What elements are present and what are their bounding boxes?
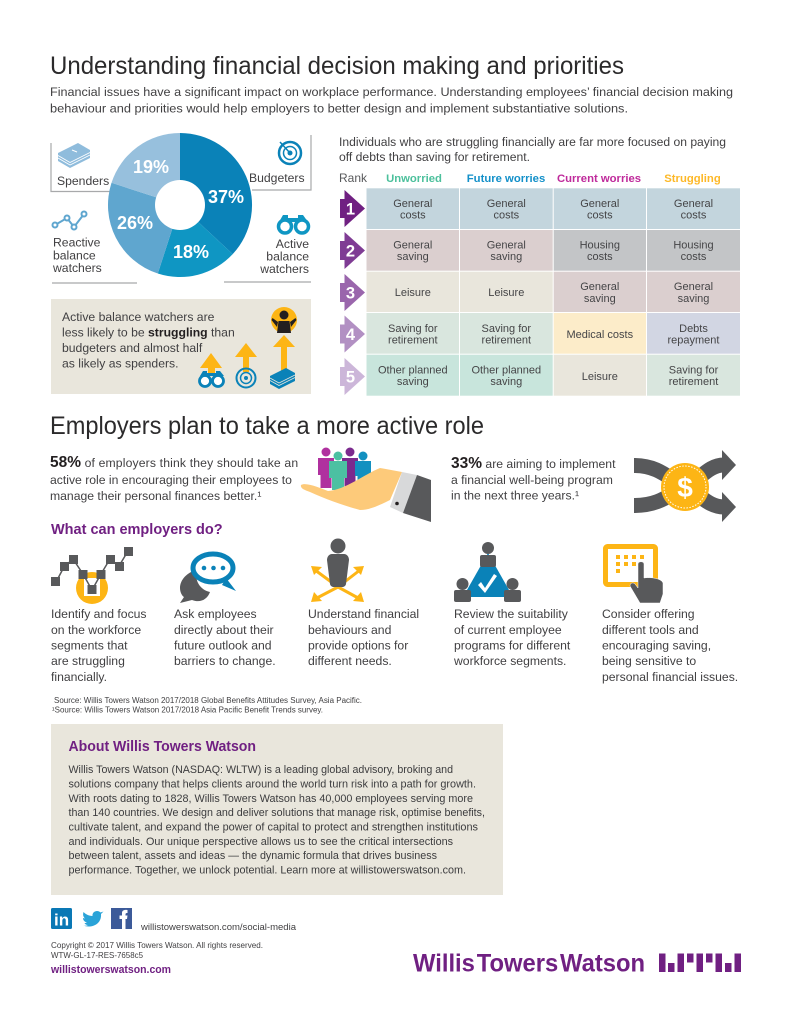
table: priorities by rank — [339, 171, 740, 396]
row 1 cells — [366, 188, 740, 229]
about text: between talent, assets and ideas — the dynamic formula that drives business — [68, 850, 437, 862]
copyright: Copyright © 2017 Willis Towers Watson. All rights reserved. — [51, 941, 263, 950]
rank badges: 2 — [346, 242, 355, 260]
text: encouraging saving, — [602, 638, 711, 652]
row 2 cells: General — [487, 240, 526, 252]
text: different needs. — [308, 654, 392, 668]
text: provide options for — [308, 638, 408, 652]
donut chart: 19% — [133, 157, 169, 177]
text: 33 percent: 33% are aiming to implement — [451, 455, 616, 472]
text: Identify and focus — [51, 607, 147, 621]
label: reactive balance watchers: balance — [53, 248, 96, 262]
row 3 cells: General — [674, 281, 713, 293]
label: reactive balance watchers — [52, 236, 102, 275]
about text: than 140 countries. We design and deliver solutions that manage risk, optimise benefits, — [68, 807, 485, 819]
icon: twitter — [82, 911, 104, 927]
icon: hand holding people — [301, 448, 431, 522]
intro text: Financial issues have a significant impact on workplace performance. Understanding employees’ financial decision making — [50, 85, 733, 99]
row 4 cells: Saving for — [388, 323, 438, 335]
heading: employers: Employers plan to take a more active role — [50, 412, 484, 440]
panel: struggling callout — [51, 299, 311, 394]
donut chart: 18% — [173, 242, 209, 262]
callout text: budgeters and almost half — [62, 341, 203, 355]
table header: Struggling — [664, 173, 721, 185]
row 1 cells: General — [393, 198, 432, 210]
icon: binoculars — [278, 215, 308, 233]
callout text: Active balance watchers are — [62, 310, 215, 324]
sleeve — [403, 475, 431, 522]
rank badges: 4 — [346, 326, 356, 344]
row 2 cells: saving — [397, 251, 429, 263]
logo — [413, 950, 741, 978]
donut chart — [108, 133, 252, 277]
source notes: ¹Source: Willis Towers Watson 2017/2018 Asia Pacific Benefit Trends survey. — [52, 706, 323, 714]
arrows: likelihood — [200, 335, 295, 376]
row 2 cells: General — [393, 240, 432, 252]
social icons — [51, 908, 297, 933]
people — [318, 448, 371, 490]
table header — [339, 171, 721, 185]
row 3 cells: Leisure — [395, 287, 431, 299]
cuff — [390, 472, 417, 513]
text: being sensitive to — [602, 654, 696, 668]
text: financially. — [51, 670, 107, 684]
text: directly about their — [174, 623, 274, 637]
website link: willistowerswatson.com — [50, 964, 171, 976]
row 5 cells: retirement — [669, 376, 718, 388]
row 1 cells: General — [580, 198, 619, 210]
text: 58 percent: 58% of employers think they should take an — [50, 454, 298, 471]
callout text: less likely to be struggling than — [62, 326, 235, 340]
callout text: as likely as spenders. — [62, 356, 179, 370]
heading: what can employers do: What can employers do? — [51, 522, 223, 538]
icon: team with check — [454, 542, 521, 602]
icon: dollar crossing arrows — [634, 450, 736, 522]
text: on the workforce — [51, 623, 141, 637]
about heading: About Willis Towers Watson — [68, 739, 256, 755]
row 2 cells: costs — [587, 251, 613, 263]
column: identify — [51, 547, 147, 684]
panel: employee segments donut — [51, 133, 311, 283]
text: workforce segments. — [453, 654, 566, 668]
row 4 cells: retirement — [482, 334, 531, 346]
text — [308, 607, 419, 668]
column: consider — [602, 546, 738, 684]
label: spenders: Spenders — [57, 174, 109, 188]
icon: small binoculars — [200, 371, 224, 386]
label: active balance watchers: watchers — [259, 262, 309, 276]
row 2 cells: saving — [490, 251, 522, 263]
row 2 cells — [366, 230, 740, 271]
text: behaviours and — [308, 623, 391, 637]
row 4 cells: Debts — [679, 323, 708, 335]
logo mark — [659, 954, 741, 972]
icon: linkedin — [51, 908, 72, 930]
text: barriers to change. — [174, 654, 276, 668]
table header: Rank — [339, 171, 368, 185]
row 5 cells — [366, 355, 740, 396]
panel: about — [51, 724, 503, 895]
label frame lines — [51, 135, 311, 283]
source notes — [52, 696, 362, 714]
row 5 cells: Other planned — [378, 364, 448, 376]
text: 58 percent — [50, 454, 298, 503]
row 3 cells: saving — [584, 293, 616, 305]
about text: Willis Towers Watson (NASDAQ: WLTW) is a leading global advisory, broking and — [68, 764, 453, 776]
row 2 cells: Housing — [673, 240, 714, 252]
icon: touch screen — [606, 546, 663, 603]
icon: small target — [236, 368, 256, 388]
icon: small money stack — [270, 368, 295, 389]
text: personal financial issues. — [602, 670, 738, 684]
icon: speech bubbles — [180, 554, 236, 603]
row 5 cells: Saving for — [669, 364, 719, 376]
row 1 cells: costs — [681, 210, 707, 222]
logo wordmark: Willis Towers Watson — [413, 950, 645, 978]
text: struggling individuals focus: Individuals who are struggling financially are far more focused on paying — [339, 135, 726, 149]
text: struggling individuals focus: off debts than saving for retirement. — [339, 150, 530, 164]
hand — [301, 468, 402, 510]
column: understand — [308, 538, 419, 668]
row 1 cells: costs — [400, 210, 426, 222]
text — [51, 607, 147, 684]
intro text: behaviour and priorities would help employers to better design and implement substantiative solutions. — [50, 102, 628, 116]
icon: facebook — [111, 908, 132, 929]
row 2 cells: Housing — [580, 240, 620, 252]
about text: solutions company that helps clients around the world turn risk into a path for growth. — [68, 778, 476, 790]
label: reactive balance watchers: Reactive — [53, 236, 101, 250]
social link: willistowerswatson.com/social-media — [140, 922, 297, 933]
label: active balance watchers: Active — [276, 237, 309, 251]
icon: dollar crossing arrows: $ — [677, 472, 693, 503]
text: 33 percent: in the next three years.¹ — [451, 488, 579, 502]
text: of current employee — [454, 623, 562, 637]
row 3 cells: General — [580, 281, 619, 293]
row 3 cells — [366, 272, 740, 312]
donut chart: 26% — [117, 213, 153, 233]
text — [602, 607, 738, 684]
column: ask — [174, 554, 276, 668]
table header: Current worries — [557, 173, 641, 185]
text: programs for different — [454, 638, 571, 652]
row 1 cells: General — [487, 198, 526, 210]
about text: and individuals. Our unique perspective allows us to see the critical intersections — [68, 836, 453, 848]
title: Understanding financial decision making and priorities — [50, 52, 624, 80]
text: Consider offering — [602, 607, 695, 621]
row 4 cells: Saving for — [482, 323, 531, 335]
icon: person with arrows — [311, 538, 364, 602]
label: active balance watchers: balance — [266, 250, 309, 264]
about text: cultivate talent, and expand the power of capital to protect and strengthen institutions — [68, 822, 478, 834]
label: active balance watchers — [259, 237, 309, 276]
row 1 cells: General — [674, 198, 713, 210]
copyright: WTW-GL-17-RES-7658c5 — [51, 951, 143, 960]
about text: performance. Together, we unlock potential. Learn more at willistowerswatson.com. — [68, 864, 466, 876]
icon: balance line — [52, 212, 86, 230]
icon: target — [279, 142, 301, 164]
text: are struggling — [51, 654, 125, 668]
row 5 cells: saving — [397, 376, 429, 388]
text: future outlook and — [174, 638, 272, 652]
intro text — [50, 85, 733, 116]
text: segments that — [51, 638, 128, 652]
text — [453, 607, 571, 668]
label: reactive balance watchers: watchers — [52, 261, 102, 275]
icon: linkedin: in — [54, 910, 69, 930]
text: 58 percent: active role in encouraging their employees to — [50, 473, 292, 487]
row 3 cells: saving — [678, 293, 709, 305]
row 3 cells: Leisure — [488, 287, 524, 299]
about text — [68, 764, 485, 876]
rank badges — [340, 190, 365, 395]
row 4 cells: Medical costs — [566, 329, 634, 341]
row 5 cells: saving — [490, 376, 522, 388]
icon: struggling person — [271, 307, 297, 333]
callout text — [62, 310, 235, 370]
copyright — [51, 941, 263, 960]
rank badges: 5 — [346, 368, 355, 386]
donut chart: 37% — [208, 187, 244, 207]
source notes: Source: Willis Towers Watson 2017/2018 Global Benefits Attitudes Survey, Asia Pacific. — [54, 696, 362, 705]
text: 33 percent: a financial well-being program — [451, 473, 613, 487]
text: Review the suitability — [454, 607, 569, 621]
row 4 cells: repayment — [668, 334, 719, 346]
text: struggling individuals focus — [339, 135, 726, 164]
row 5 cells: Other planned — [471, 364, 541, 376]
table header: Future worries — [467, 173, 545, 185]
rank badges: 1 — [346, 200, 355, 218]
row 5 cells: Leisure — [582, 371, 618, 383]
rank badges: 3 — [346, 284, 355, 302]
row 2 cells: costs — [681, 251, 707, 263]
text: 58 percent: manage their personal finances better.¹ — [50, 489, 261, 503]
text — [174, 607, 276, 668]
row 1 cells: costs — [587, 210, 613, 222]
text: Understand financial — [308, 607, 419, 621]
icon: money stack — [58, 143, 90, 168]
text: 33 percent — [451, 455, 616, 502]
icon: line chart focus — [51, 547, 133, 604]
text: Ask employees — [174, 607, 257, 621]
column: review — [453, 542, 571, 668]
text: different tools and — [602, 623, 699, 637]
about text: With roots dating to 1828, Willis Towers Watson has 40,000 employees serving more — [68, 793, 473, 805]
row 4 cells: retirement — [388, 334, 438, 346]
row 4 cells — [366, 313, 740, 354]
row 1 cells: costs — [493, 210, 520, 222]
label: budgeters: Budgeters — [249, 171, 305, 185]
table header: Unworried — [386, 173, 442, 185]
